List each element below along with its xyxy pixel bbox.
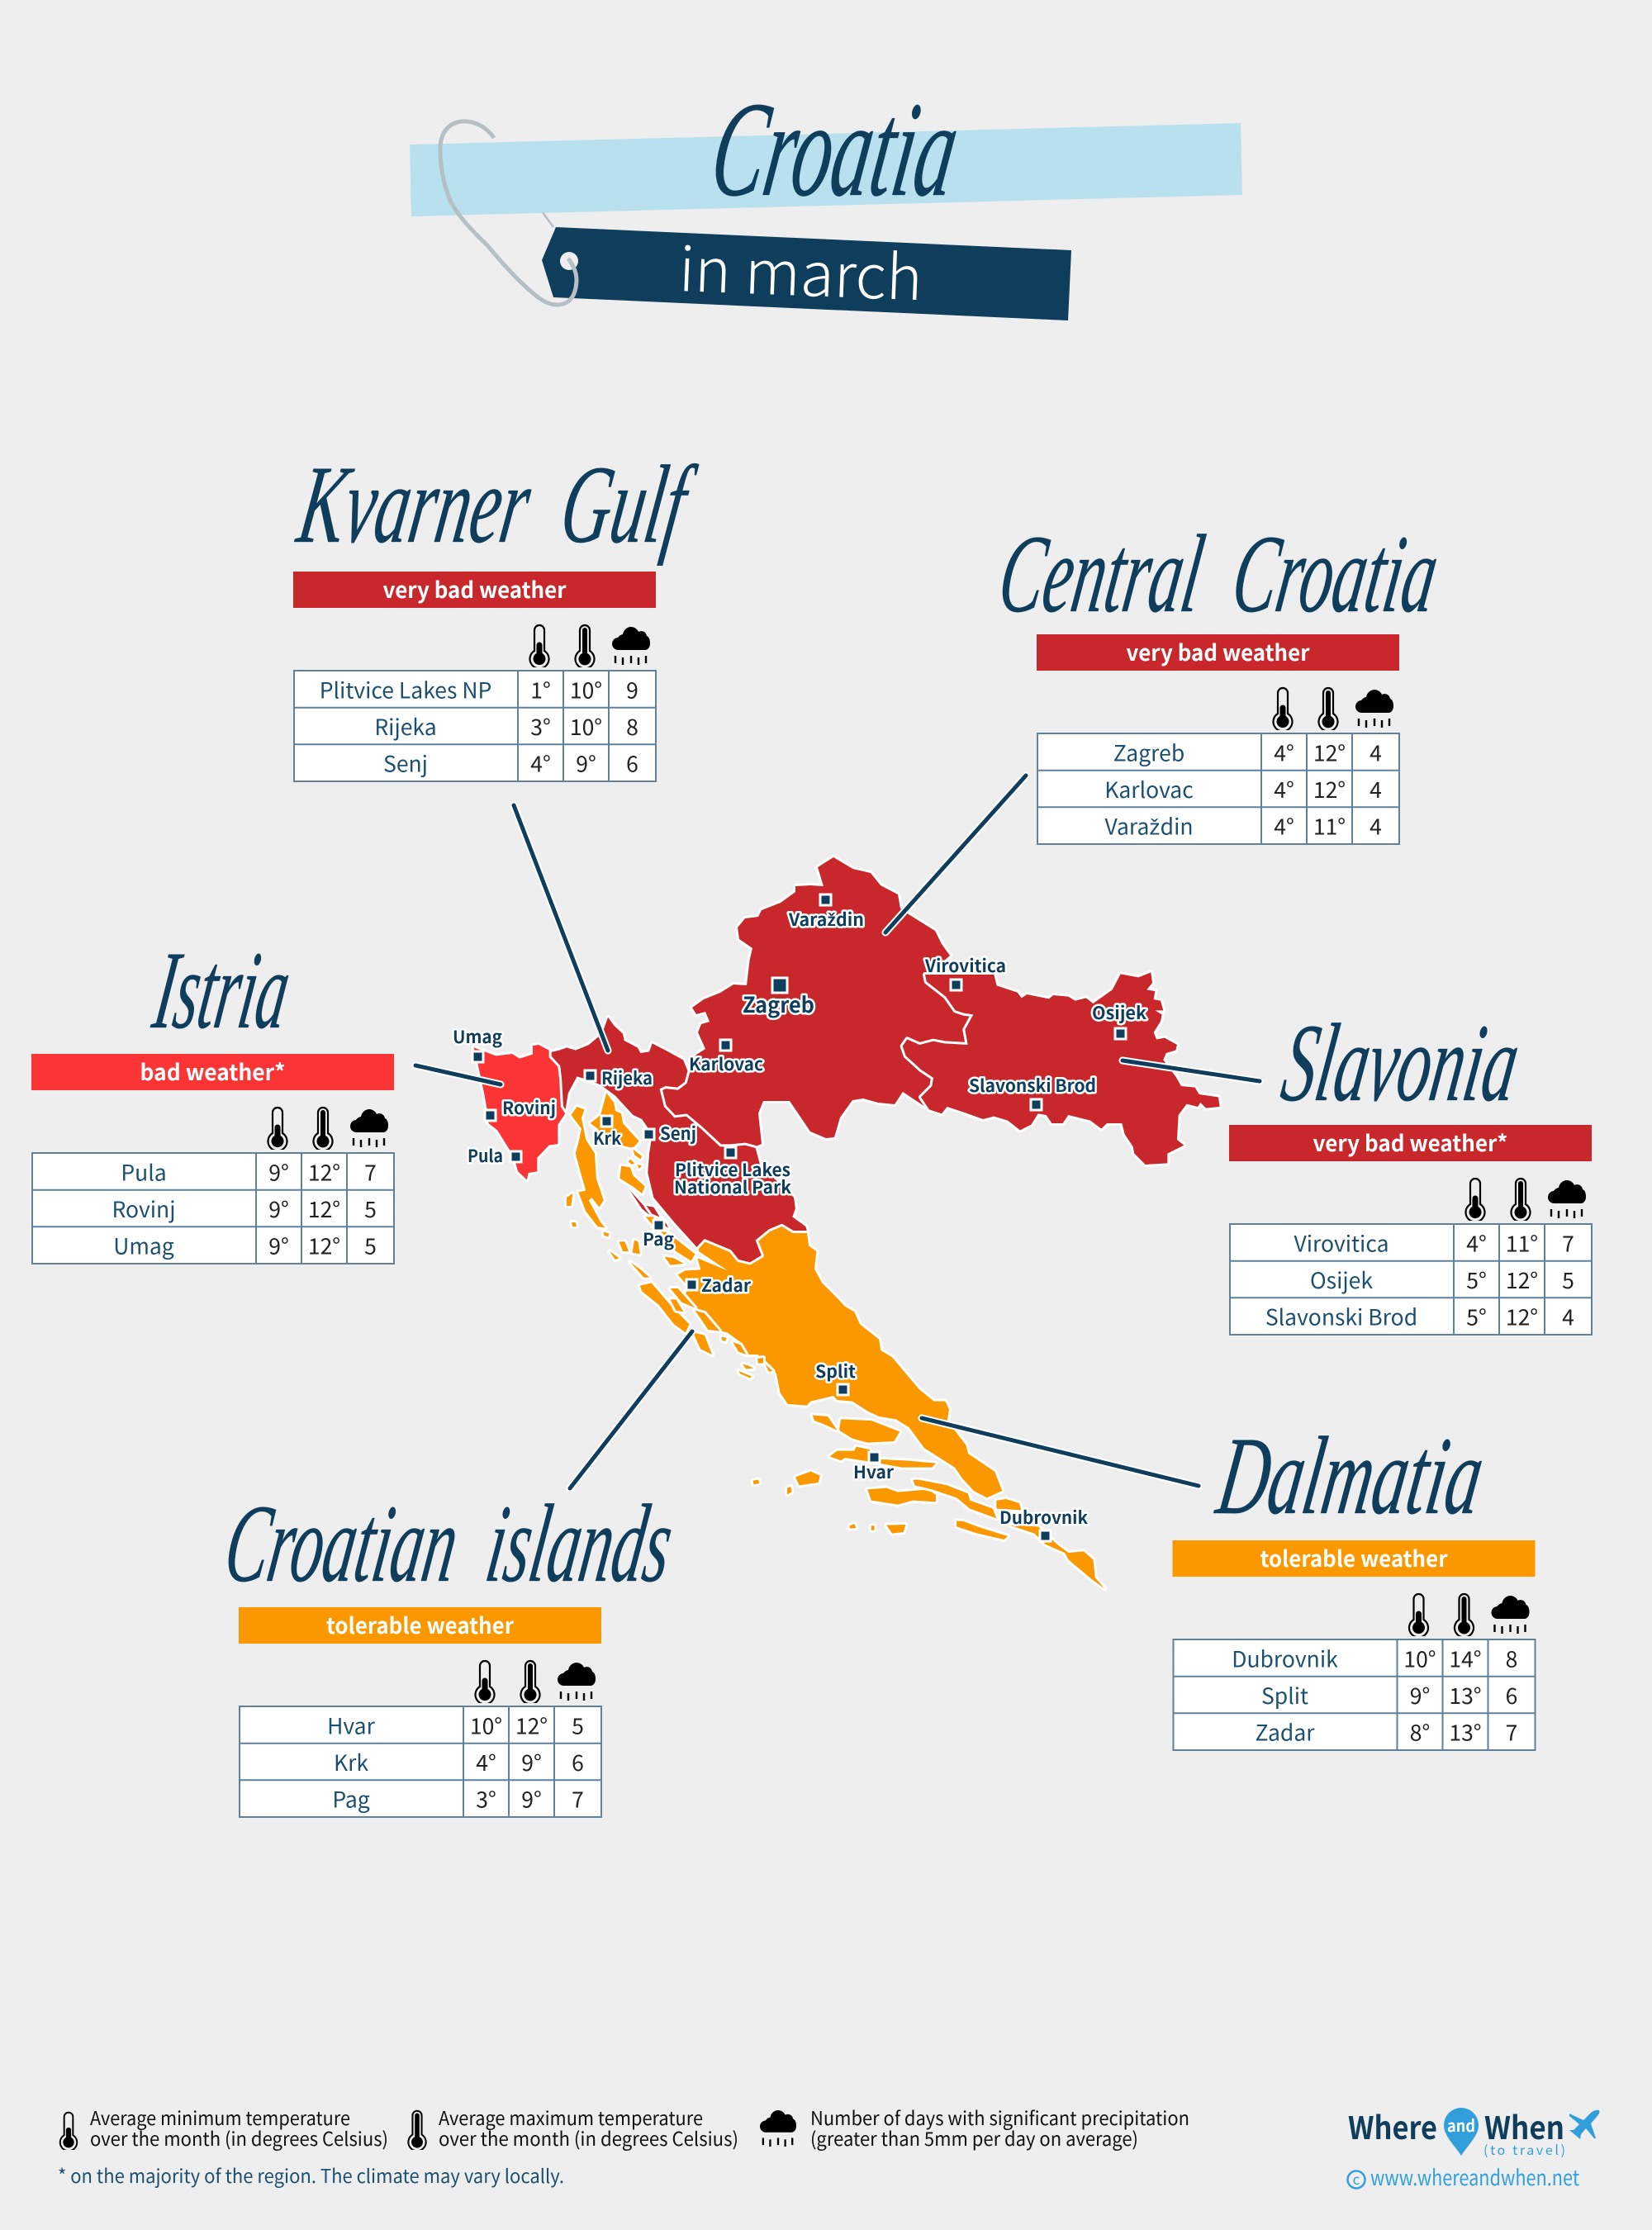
table: 7 (364, 1155, 377, 1188)
rating bar (31, 1054, 394, 1090)
legend (58, 2103, 1189, 2189)
table: 3° (530, 709, 551, 742)
table: 4° (1466, 1226, 1487, 1259)
icon: minimum temperature (60, 2113, 77, 2151)
tag cord loop (440, 121, 577, 305)
table: 4 (1370, 809, 1382, 841)
rating bar (293, 572, 656, 608)
table: 6 (572, 1745, 584, 1777)
table: Senj (383, 747, 428, 778)
rating bar (1173, 1540, 1535, 1577)
logo word: When: When (1484, 2103, 1564, 2148)
icon: minimum temperature (268, 1108, 287, 1151)
table: 5 (364, 1192, 377, 1224)
city labels: Rijeka (601, 1065, 653, 1090)
heading: Dalmatia: Dalmatia (1209, 1415, 1492, 1538)
table: Split (1261, 1678, 1308, 1710)
panel: Istria (31, 1054, 394, 1264)
icon: maximum temperature (1512, 1179, 1530, 1222)
table: 10° (470, 1708, 502, 1741)
table: 12° (1313, 735, 1346, 768)
table (240, 1706, 601, 1817)
icon: precipitation (1491, 1596, 1530, 1634)
legend text: minimum line 2: over the month (in degrees Celsius) (90, 2123, 388, 2152)
leader line: Kvarner Gulf (514, 805, 608, 1051)
rating text: very bad weather* (1313, 1126, 1508, 1158)
table: Plitvice Lakes NP (320, 672, 491, 705)
icon: precipitation (1355, 690, 1393, 728)
icon: minimum temperature (1409, 1594, 1428, 1637)
table: 7 (1562, 1226, 1574, 1259)
table: 5° (1466, 1300, 1487, 1331)
heading: Kvarner Gulf: Kvarner Gulf (290, 444, 703, 567)
table: 9° (521, 1745, 542, 1777)
city labels: Plitvice Lakes (675, 1157, 790, 1182)
table (1037, 733, 1399, 844)
table: Osijek (1310, 1263, 1373, 1295)
leader line: Dalmatia (922, 1418, 1199, 1486)
logo word: Where: Where (1348, 2103, 1437, 2148)
table: 9° (521, 1782, 542, 1814)
table: 4° (1274, 772, 1294, 804)
city labels: Virovitica (924, 953, 1006, 978)
city labels: Osijek (1092, 1000, 1146, 1025)
city labels: Split (815, 1359, 856, 1383)
table: 4 (1562, 1300, 1574, 1331)
table: 10° (1403, 1642, 1436, 1673)
legend text: maximum: Average maximum temperature (439, 2103, 703, 2131)
city labels: National Park (674, 1174, 791, 1199)
table: 9° (576, 747, 596, 778)
red islands (630, 1191, 668, 1228)
table: Dubrovnik (1232, 1642, 1338, 1673)
table: Varaždin (1104, 809, 1194, 841)
table: 5° (1466, 1263, 1487, 1295)
region: Slavonia (903, 972, 1220, 1165)
table: 13° (1449, 1715, 1482, 1748)
legend text: precipitation: Number of days with significant precipitation (810, 2103, 1189, 2131)
table: 4 (1370, 735, 1382, 768)
icon: minimum temperature (530, 625, 548, 668)
table: 3° (476, 1782, 496, 1814)
table: 4° (476, 1745, 496, 1777)
city labels: Dubrovnik (999, 1505, 1088, 1530)
panel: Slavonia (1229, 1125, 1592, 1335)
table: 1° (530, 672, 551, 705)
table: 12° (308, 1229, 340, 1260)
icon: maximum temperature (408, 2111, 426, 2151)
table: 7 (572, 1782, 584, 1814)
city labels: Pula (468, 1143, 503, 1168)
icon: minimum temperature (1274, 688, 1292, 731)
rating bar (1229, 1125, 1592, 1161)
city markers (472, 894, 1126, 1541)
city labels: Umag (453, 1024, 502, 1049)
table: 10° (570, 672, 602, 705)
region: Central Croatia (660, 857, 973, 1146)
table: 9° (268, 1192, 289, 1224)
table: 10° (570, 709, 602, 742)
table: 4° (1274, 809, 1294, 841)
icon: maximum temperature (314, 1108, 332, 1151)
leader line: Central Croatia (885, 776, 1026, 932)
icon: minimum temperature (1465, 1179, 1485, 1222)
icon: precipitation (1548, 1180, 1586, 1218)
heading: Croatian islands: Croatian islands (217, 1483, 681, 1606)
city labels: Karlovac (689, 1051, 763, 1076)
rating text: very bad weather (383, 572, 567, 605)
table: 12° (515, 1708, 548, 1741)
table: 14° (1449, 1642, 1482, 1673)
legend text: precipitation line 2: (greater than 5mm per day on average) (810, 2123, 1138, 2152)
table: 11° (1506, 1226, 1538, 1259)
heading: Istria: Istria (146, 929, 298, 1052)
logo word: and: and (1447, 2113, 1475, 2137)
leader line: Croatian islands (570, 1331, 692, 1488)
city labels: Rovinj (502, 1095, 556, 1120)
table (1173, 1639, 1535, 1750)
table: 12° (1313, 772, 1346, 804)
Dalmatian islands (610, 1217, 1104, 1588)
logo pin (1444, 2108, 1479, 2156)
legend text: maximum line 2: over the month (in degrees Celsius) (439, 2123, 738, 2152)
title ribbon (410, 123, 1242, 216)
city labels: Senj (660, 1121, 696, 1146)
table: 6 (1506, 1678, 1517, 1710)
icon: maximum temperature (1455, 1594, 1474, 1637)
copyright icon (1348, 2168, 1365, 2189)
leader line: Istria (415, 1065, 501, 1084)
table: Umag (113, 1229, 174, 1260)
rating text: bad weather* (140, 1055, 286, 1087)
table: 4° (1274, 735, 1294, 768)
Kvarner islands (567, 1093, 645, 1236)
title block (410, 74, 1242, 320)
icon: precipitation (350, 1109, 388, 1147)
table: Zadar (1255, 1715, 1315, 1748)
city labels: Zadar (701, 1273, 752, 1298)
logo plane (1569, 2110, 1599, 2139)
copyright icon: c (1353, 2168, 1360, 2189)
table (32, 1153, 394, 1264)
logo tagline: (to travel) (1483, 2139, 1565, 2159)
icon: maximum temperature (520, 1661, 540, 1704)
logo (1348, 2103, 1599, 2192)
table: 9 (626, 672, 638, 705)
footnote: * on the majority of the region. The climate may vary locally. (58, 2161, 564, 2189)
city labels: Slavonski Brod (969, 1073, 1096, 1098)
panel: Croatian islands (239, 1607, 601, 1817)
table: Zagreb (1113, 735, 1184, 768)
table: 5 (364, 1229, 377, 1260)
table: 12° (308, 1155, 340, 1188)
table: 4° (530, 747, 551, 778)
rating bar (239, 1607, 601, 1644)
table: 13° (1449, 1678, 1482, 1710)
city labels: Varaždin (788, 907, 864, 932)
map of Croatia (474, 857, 1220, 1588)
icon: minimum temperature (476, 1661, 494, 1704)
table (1230, 1224, 1592, 1335)
rating text: very bad weather (1127, 635, 1310, 667)
table: Slavonski Brod (1265, 1300, 1417, 1331)
icon: maximum temperature (575, 625, 595, 668)
region: Kvarner Gulf (549, 1018, 807, 1262)
leader line: Slavonia (1123, 1060, 1260, 1081)
heading: Croatia: Croatia (702, 74, 968, 225)
tag hole (560, 252, 578, 270)
subtitle: in march (677, 221, 924, 318)
city labels: Hvar (853, 1459, 895, 1484)
legend text: minimum: Average minimum temperature (90, 2103, 350, 2131)
table: 4 (1370, 772, 1382, 804)
table: 8 (626, 709, 638, 742)
table: 12° (308, 1192, 340, 1224)
tag string stub (543, 212, 553, 227)
table (294, 671, 656, 781)
table: 12° (1506, 1263, 1538, 1295)
city labels: Zagreb (743, 989, 814, 1019)
table: 11° (1313, 809, 1346, 841)
table: 5 (1562, 1263, 1574, 1295)
icon: precipitation (760, 2110, 796, 2147)
panel: Kvarner Gulf (293, 572, 656, 781)
panel: Central Croatia (1037, 634, 1399, 844)
icon: precipitation (612, 627, 650, 665)
table: 9° (1410, 1678, 1430, 1710)
table: 12° (1506, 1300, 1538, 1331)
website: www.whereandwhen.net (1370, 2161, 1579, 2192)
city labels: Krk (593, 1126, 621, 1151)
table: Karlovac (1104, 772, 1194, 804)
table: Rijeka (374, 709, 437, 742)
table: 5 (572, 1708, 584, 1741)
tag (542, 227, 1071, 320)
table: Pula (121, 1155, 167, 1188)
table: 9° (268, 1155, 289, 1188)
city labels: Pag (643, 1226, 674, 1251)
icon: precipitation (558, 1663, 596, 1701)
table: Pag (332, 1782, 370, 1814)
region: Dalmatia (678, 1224, 1002, 1497)
table: 7 (1506, 1715, 1517, 1748)
table: Virovitica (1294, 1226, 1389, 1259)
table: 9° (268, 1229, 289, 1260)
panel: Dalmatia (1173, 1540, 1535, 1750)
city labels (453, 907, 1146, 1530)
region: Istria (474, 1045, 565, 1179)
table: 8° (1410, 1715, 1430, 1748)
table: Hvar (327, 1708, 376, 1741)
table: 6 (626, 747, 638, 778)
rating text: tolerable weather (326, 1608, 514, 1640)
rating text: tolerable weather (1260, 1541, 1448, 1573)
table: Krk (334, 1745, 368, 1777)
icon: maximum temperature (1318, 688, 1338, 731)
table: 8 (1506, 1642, 1517, 1673)
table: Rovinj (112, 1192, 176, 1224)
rating bar (1037, 634, 1399, 671)
